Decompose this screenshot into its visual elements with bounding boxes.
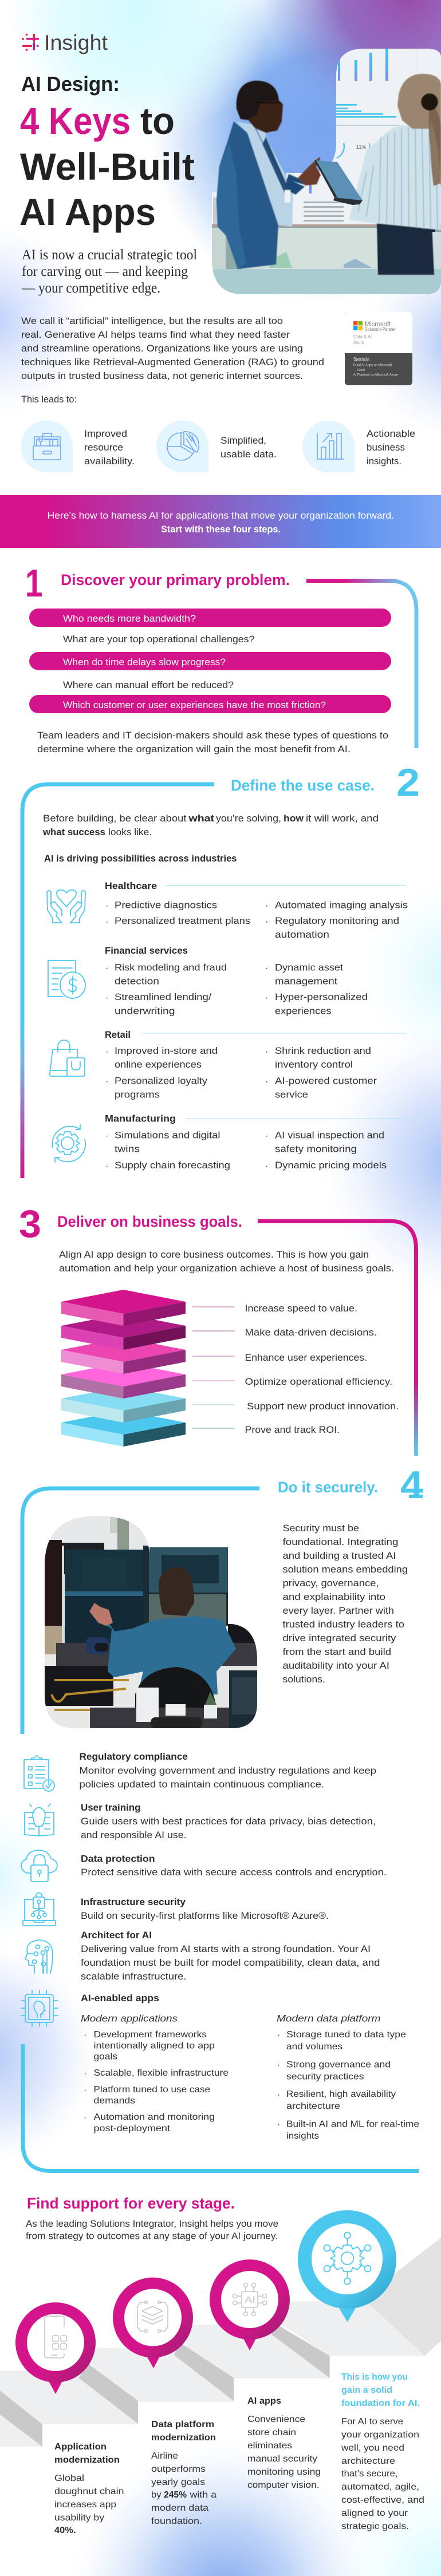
stage text: solid foundation: For AI to serve xyxy=(341,2417,403,2427)
stage text: application modernization: Application xyxy=(54,2442,107,2452)
intro text: you’re solving, xyxy=(216,813,281,824)
industry: retail: online experiences xyxy=(115,1059,202,1070)
question 2: What are your top operational challenges? xyxy=(63,634,254,645)
stage text: AI apps: store chain xyxy=(247,2428,296,2437)
number 2: 2 xyxy=(396,761,420,804)
item: AI-enabled apps: AI-enabled apps xyxy=(81,1993,159,2004)
security paragraph: and building a trusted AI xyxy=(283,1550,396,1561)
item: AI-enabled apps xyxy=(21,1990,419,2141)
industry: manufacturing: · xyxy=(105,1161,108,1171)
badge: Microsoft Solutions Partner: Microsoft xyxy=(365,320,391,328)
security paragraph: privacy, governance, xyxy=(283,1578,379,1589)
stage text: solid foundation: architecture xyxy=(341,2456,395,2466)
benefit: actionable business insights: insights. xyxy=(367,456,401,467)
number 1: 1 xyxy=(25,562,42,605)
connector line xyxy=(22,784,214,1178)
benefit: improved resource availability: availability. xyxy=(84,456,135,467)
title: 4 Keys xyxy=(20,100,131,142)
list: modern data platform xyxy=(277,2013,419,2141)
industry: manufacturing: Supply chain forecasting xyxy=(115,1160,230,1171)
closing text: determine where the organization will gain the most benefit from AI. xyxy=(37,744,351,754)
pin: AI apps xyxy=(210,2259,290,2350)
connector line xyxy=(22,1488,259,1734)
industry: retail: service xyxy=(275,1089,308,1100)
intro text: looks like. xyxy=(108,827,152,837)
industry: manufacturing: · xyxy=(105,1131,108,1141)
item: user training: and responsible AI use. xyxy=(81,1830,187,1840)
stage text: data platform modernization: by xyxy=(151,2490,162,2500)
industry: financial services: · xyxy=(265,993,268,1003)
industry: retail: Improved in-store and xyxy=(115,1045,218,1056)
intro text: Before building, be clear about xyxy=(43,813,187,824)
list: modern data platform: Resilient, high availability xyxy=(286,2089,396,2099)
industry: healthcare: · xyxy=(105,917,108,927)
industry: retail xyxy=(50,1029,406,1100)
industry: financial services: · xyxy=(105,963,108,973)
icon: open book with light bulb xyxy=(25,1804,54,1836)
industry: healthcare xyxy=(47,880,408,940)
subtitle xyxy=(21,247,197,296)
stage text: solid foundation: This is how you xyxy=(341,2372,408,2382)
list: modern data platform: Built-in AI and ML for real-time xyxy=(286,2119,419,2129)
item: data protection xyxy=(21,1850,387,1882)
item: user training: User training xyxy=(81,1802,141,1813)
list: modern data platform: and volumes xyxy=(286,2042,342,2052)
industry: retail: inventory control xyxy=(275,1059,353,1070)
list: modern data platform: · xyxy=(277,2120,280,2129)
intro text: Align AI app design to core business outcomes. This is how you gain xyxy=(59,1249,369,1260)
list: modern applications: demands xyxy=(94,2096,135,2105)
stage text: solid foundation: aligned to your xyxy=(341,2508,408,2518)
security paragraph: and explainability into xyxy=(283,1591,385,1602)
industry: manufacturing: · xyxy=(265,1131,268,1141)
icon: head with circuits xyxy=(25,1940,53,1973)
connector line xyxy=(258,1221,416,1456)
industry: manufacturing xyxy=(52,1113,406,1171)
item: data protection: Protect sensitive data with secure access controls and encryption. xyxy=(81,1867,387,1878)
item: infrastructure security xyxy=(23,1893,329,1926)
stage text: application modernization: increases app xyxy=(54,2500,116,2510)
stage text: data platform modernization: Airline xyxy=(151,2451,178,2461)
badge: Microsoft Solutions Partner: Azure xyxy=(353,340,364,345)
stage text: application modernization: 40%. xyxy=(54,2526,76,2535)
pill question 5: Which customer or user experiences have the most friction? xyxy=(63,700,326,710)
icon: cloud with lock xyxy=(21,1850,57,1882)
industry: manufacturing: · xyxy=(265,1161,268,1171)
item: user training xyxy=(25,1802,376,1840)
heading: Discover your primary problem. xyxy=(61,571,290,588)
list: modern applications: Automation and monitoring xyxy=(94,2112,215,2122)
badge: Microsoft Solutions Partner: Solutions Partner xyxy=(365,327,396,332)
pin: AI apps: AI xyxy=(245,2294,255,2305)
intro text xyxy=(42,813,379,837)
badge: Microsoft Solutions Partner: AI Platform on Microsoft Azure xyxy=(353,373,399,377)
stack labels: Increase speed to value. xyxy=(245,1303,357,1314)
list: modern applications: · xyxy=(84,2030,86,2040)
stack labels: Prove and track ROI. xyxy=(245,1424,340,1435)
list: modern applications: post-deployment xyxy=(94,2124,171,2134)
badge: Microsoft Solutions Partner: Specialist xyxy=(353,357,370,362)
list: modern applications: Scalable, flexible infrastructure xyxy=(94,2068,229,2078)
list: modern applications: · xyxy=(84,2113,86,2123)
list: modern applications: Development frameworks xyxy=(94,2030,207,2040)
stage text: solid foundation: foundation for AI. xyxy=(341,2399,420,2408)
industry: healthcare: · xyxy=(265,917,268,927)
stack labels: Support new product innovation. xyxy=(247,1401,399,1412)
list: modern applications: goals xyxy=(94,2052,117,2062)
badge: Microsoft Solutions Partner: Azure xyxy=(357,369,365,372)
stage text: data platform modernization: yearly goals xyxy=(151,2478,205,2487)
industry: retail: · xyxy=(265,1047,268,1057)
pill question 1: Who needs more bandwidth? xyxy=(63,613,196,624)
intro text xyxy=(59,1249,394,1274)
item: infrastructure security: Build on security-first platforms like Microsoft® Azure®. xyxy=(81,1910,329,1921)
stage text: data platform modernization: foundation. xyxy=(151,2516,202,2526)
list: modern data platform: insights xyxy=(286,2131,319,2141)
item: architect for AI: Delivering value from AI starts with a strong foundation. Your AI xyxy=(81,1943,371,1954)
section 1: discover your primary problem xyxy=(25,562,416,754)
subtitle: — your competitive edge. xyxy=(21,280,160,296)
industry: retail: · xyxy=(105,1047,108,1057)
list: modern data platform: · xyxy=(277,2090,280,2100)
industry: healthcare: automation xyxy=(275,929,329,940)
photo: developer at monitors xyxy=(45,1516,262,1729)
item: user training: Guide users with best practices for data privacy, bias detection, xyxy=(81,1816,376,1827)
stage text: application modernization: doughnut chain xyxy=(54,2487,124,2496)
icon: AI chip xyxy=(233,2283,267,2316)
icon: gear network xyxy=(324,2233,371,2284)
stage text: solid foundation: well, you need xyxy=(341,2443,404,2453)
layered stack diagram xyxy=(61,1290,186,1447)
industry: manufacturing: twins xyxy=(115,1144,140,1154)
list: modern applications xyxy=(81,2013,229,2134)
title: to xyxy=(140,100,175,142)
item: regulatory compliance: Monitor evolving government and industry regulations and keep xyxy=(79,1765,376,1776)
list: modern data platform: · xyxy=(277,2030,280,2040)
item: data protection: Data protection xyxy=(81,1854,155,1864)
intro paragraph xyxy=(21,315,324,405)
subheading: AI is driving possibilities across industries xyxy=(44,853,237,864)
stack labels: Optimize operational efficiency. xyxy=(245,1376,392,1387)
industry: healthcare: Predictive diagnostics xyxy=(115,900,217,910)
item: architect for AI: Architect for AI xyxy=(81,1930,152,1941)
intro paragraph: This leads to: xyxy=(21,394,77,405)
section 3: deliver on business goals xyxy=(19,1202,416,1456)
question 4: Where can manual effort be reduced? xyxy=(63,679,234,690)
icon: clipboard checklist xyxy=(24,1756,54,1791)
icon: laptop with lock xyxy=(23,1893,56,1926)
badge: Microsoft Solutions Partner xyxy=(345,312,412,385)
industry: financial services: Hyper-personalized xyxy=(275,991,368,1002)
pill question 3: When do time delays slow progress? xyxy=(63,657,226,667)
heading: Do it securely. xyxy=(278,1479,378,1496)
list: modern applications: · xyxy=(84,2069,86,2079)
security paragraph: every layer. Partner with xyxy=(283,1605,394,1616)
industry: healthcare: Regulatory monitoring and xyxy=(275,915,399,926)
industry: manufacturing: safety monitoring xyxy=(275,1144,357,1154)
logo: Insight: Insight xyxy=(44,31,108,54)
security paragraph: auditability into your AI xyxy=(283,1660,389,1671)
list: modern data platform: Strong governance and xyxy=(286,2060,391,2070)
icon: gear with cycle arrows xyxy=(52,1125,85,1162)
industry: manufacturing: AI visual inspection and xyxy=(275,1130,384,1140)
stage text: data platform modernization xyxy=(151,2420,216,2526)
icon: hands with heart xyxy=(47,890,85,923)
connector line xyxy=(306,580,416,748)
security paragraph: solutions. xyxy=(283,1674,325,1685)
heading: Deliver on business goals. xyxy=(57,1213,242,1230)
list: modern data platform: Storage tuned to data type xyxy=(286,2030,406,2040)
banner: Start with these four steps. xyxy=(161,524,281,535)
industry: manufacturing: Manufacturing xyxy=(105,1113,176,1124)
industry: retail: · xyxy=(105,1077,108,1086)
item: regulatory compliance: Regulatory compliance xyxy=(79,1751,188,1762)
industry: financial services: Financial services xyxy=(105,945,188,956)
benefit: actionable business insights xyxy=(302,421,415,472)
intro text: automation and help your organization achieve a host of business goals. xyxy=(59,1263,394,1274)
benefit: simplified usable data: Simplified, xyxy=(220,435,266,446)
intro paragraph: and streamline operations. Organizations like yours are using xyxy=(21,343,303,354)
support section heading: from strategy to outcomes at any stage of your AI journey. xyxy=(26,2230,278,2242)
security paragraph xyxy=(283,1523,408,1685)
stage text: AI apps: manual security xyxy=(247,2454,317,2464)
man in blue cardigan xyxy=(216,81,321,269)
stage text: data platform modernization: with a xyxy=(189,2490,216,2500)
pill question 1 xyxy=(29,609,391,627)
intro paragraph: We call it “artificial” intelligence, but the results are all too xyxy=(21,315,283,326)
icon: mobile app xyxy=(45,2316,66,2358)
icon: toolbox xyxy=(33,433,61,460)
security paragraph: solution means embedding xyxy=(283,1564,408,1575)
benefit: actionable business insights: Actionable xyxy=(367,428,415,439)
pill question 3 xyxy=(29,652,391,670)
industry: manufacturing: Dynamic pricing models xyxy=(275,1160,387,1171)
benefit: actionable business insights: business xyxy=(367,442,405,453)
title: AI Apps xyxy=(19,191,156,233)
item: architect for AI xyxy=(25,1930,380,1982)
pin: data platform modernization xyxy=(113,2277,193,2368)
industry: healthcare: · xyxy=(105,901,108,911)
list: modern data platform: · xyxy=(277,2060,280,2070)
stage text: data platform modernization: outperforms xyxy=(151,2464,206,2474)
stage text: data platform modernization: modern data xyxy=(151,2503,208,2513)
icon: data layers xyxy=(137,2301,168,2332)
stack labels: Make data-driven decisions. xyxy=(245,1327,377,1338)
title: Well-Built xyxy=(20,145,195,188)
intro text: how xyxy=(284,813,304,824)
bottom connector line xyxy=(23,2044,419,2171)
banner xyxy=(0,495,441,548)
support section heading: Find support for every stage. xyxy=(27,2195,235,2212)
industry: healthcare: Healthcare xyxy=(105,880,157,891)
list: modern applications: Platform tuned to use case xyxy=(94,2085,210,2095)
number 3: 3 xyxy=(19,1202,41,1246)
industry: financial services: · xyxy=(265,963,268,973)
list: modern data platform: architecture xyxy=(286,2101,340,2111)
list: modern applications: Modern applications xyxy=(81,2013,178,2024)
security paragraph: drive integrated security xyxy=(283,1633,396,1643)
stage text: data platform modernization: 245% xyxy=(164,2490,187,2500)
stage text: solid foundation: that’s secure, xyxy=(341,2469,397,2479)
pin: solid foundation xyxy=(298,2210,396,2322)
industry: retail: Shrink reduction and xyxy=(275,1045,371,1056)
pin: application modernization xyxy=(15,2302,96,2394)
industry: retail: Retail xyxy=(105,1029,131,1040)
industry: financial services: experiences xyxy=(275,1005,331,1017)
icon: shopping bags xyxy=(50,1040,85,1076)
stage text: data platform modernization: Data platform xyxy=(151,2420,214,2429)
stage text: solid foundation: your organization xyxy=(341,2430,419,2440)
stage text: solid foundation: automated, agile, xyxy=(341,2482,419,2492)
benefit: improved resource availability: resource xyxy=(84,442,123,453)
industry: manufacturing: Simulations and digital xyxy=(115,1130,220,1140)
icon: chip with head xyxy=(21,1990,58,2026)
stage text: solid foundation: strategic goals. xyxy=(341,2522,409,2531)
item: architect for AI: foundation must be built for model compatibility, clean data, and xyxy=(81,1957,380,1968)
stage text: solid foundation: gain a solid xyxy=(341,2385,392,2395)
industry: retail: AI-powered customer xyxy=(275,1075,377,1086)
item: regulatory compliance xyxy=(24,1751,376,1791)
heading: Define the use case. xyxy=(231,777,375,794)
closing text xyxy=(37,730,388,754)
benefit: improved resource availability xyxy=(21,421,135,472)
banner: Here’s how to harness AI for applications that move your organization forward. xyxy=(47,510,394,521)
industry: healthcare: · xyxy=(265,901,268,911)
title: AI Design: xyxy=(21,72,120,96)
list: modern data platform: Modern data platform xyxy=(277,2013,380,2024)
pill question 5 xyxy=(29,695,391,713)
stack labels: Enhance user experiences. xyxy=(245,1352,367,1363)
stage text: application modernization xyxy=(54,2442,124,2535)
stage text: data platform modernization: modernization xyxy=(151,2433,216,2443)
hero photo: two people at dashboards xyxy=(212,49,441,295)
industry: financial services: Dynamic asset xyxy=(275,962,343,973)
industry: financial services: management xyxy=(275,975,337,987)
item: infrastructure security: Infrastructure security xyxy=(81,1897,186,1907)
stage text: solid foundation xyxy=(341,2372,424,2531)
intro paragraph: techniques like Retrieval-Augmented Generation (RAG) to ground xyxy=(21,357,324,368)
stage text: AI apps: AI apps xyxy=(247,2396,281,2406)
stage text: application modernization: usability by xyxy=(54,2513,104,2523)
stage text: AI apps: Convenience xyxy=(247,2415,305,2424)
security paragraph: foundational. Integrating xyxy=(283,1536,399,1547)
benefit: improved resource availability: Improved xyxy=(84,428,127,439)
stage text: application modernization: Global xyxy=(54,2474,84,2483)
security paragraph: from the start and build xyxy=(283,1646,391,1657)
number 4: 4 xyxy=(400,1463,423,1507)
intro paragraph: real. Generative AI helps teams find what they need faster xyxy=(21,329,290,340)
intro text: it will work, and xyxy=(306,813,379,824)
section 2: define the use case xyxy=(22,761,420,1178)
security paragraph: Security must be xyxy=(283,1523,359,1534)
icon: bar chart with arrow xyxy=(317,433,344,459)
industry: healthcare: Personalized treatment plans xyxy=(115,915,250,926)
stage text: AI apps: eliminates xyxy=(247,2441,292,2451)
section 4: do it securely xyxy=(21,1463,423,2171)
industry: financial services: Risk modeling and fraud xyxy=(115,962,227,973)
badge: Microsoft Solutions Partner: Build AI Apps on Microsoft xyxy=(353,364,392,368)
item: regulatory compliance: policies updated to maintain continuous compliance. xyxy=(79,1779,324,1789)
security paragraph: trusted industry leaders to xyxy=(283,1619,404,1630)
item: architect for AI: scalable infrastructure. xyxy=(81,1971,187,1982)
stage text: AI apps xyxy=(247,2396,321,2490)
industry: financial services: underwriting xyxy=(115,1005,175,1017)
icon: pie chart xyxy=(167,432,199,460)
intro paragraph: outputs in trusted business data, not generic internet sources. xyxy=(21,370,303,381)
industry: retail: Personalized loyalty xyxy=(115,1075,208,1086)
closing text: Team leaders and IT decision-makers should ask these types of questions to xyxy=(37,730,388,741)
list: modern applications: · xyxy=(84,2085,86,2095)
benefit: simplified usable data xyxy=(156,421,277,472)
intro text: what success xyxy=(42,827,105,837)
industry: retail: · xyxy=(265,1077,268,1086)
stage text: AI apps: monitoring using xyxy=(247,2467,321,2477)
subtitle: for carving out — and keeping xyxy=(22,264,188,279)
industry: financial services: · xyxy=(105,993,108,1003)
staircase graphic xyxy=(0,2238,441,2447)
list: modern data platform: security practices xyxy=(286,2072,364,2081)
stage text: AI apps: computer vision. xyxy=(247,2480,320,2490)
industry: financial services: detection xyxy=(115,975,159,987)
woman in striped shirt xyxy=(349,74,441,275)
title xyxy=(19,72,195,233)
icon: document with dollar coin xyxy=(48,961,85,998)
industry: retail: programs xyxy=(115,1089,160,1100)
industry: financial services xyxy=(48,945,368,1017)
hero photo: two people at dashboards: 11% xyxy=(356,144,366,150)
support section heading: As the leading Solutions Integrator, Insight helps you move xyxy=(26,2218,278,2229)
stage text: application modernization: modernization xyxy=(54,2455,120,2465)
stage text: solid foundation: cost-effective, and xyxy=(341,2495,424,2505)
industry: healthcare: Automated imaging analysis xyxy=(275,900,408,910)
subtitle: AI is now a crucial strategic tool xyxy=(22,247,197,263)
benefit: simplified usable data: usable data. xyxy=(220,449,277,460)
industry: financial services: Streamlined lending/ xyxy=(115,991,211,1002)
badge: Microsoft Solutions Partner: Data & AI xyxy=(353,334,372,339)
support section heading xyxy=(26,2195,278,2242)
laptop xyxy=(314,160,363,205)
stack labels xyxy=(192,1303,399,1435)
intro text: what xyxy=(188,813,214,824)
list: modern applications: intentionally aligned to app xyxy=(94,2041,215,2050)
